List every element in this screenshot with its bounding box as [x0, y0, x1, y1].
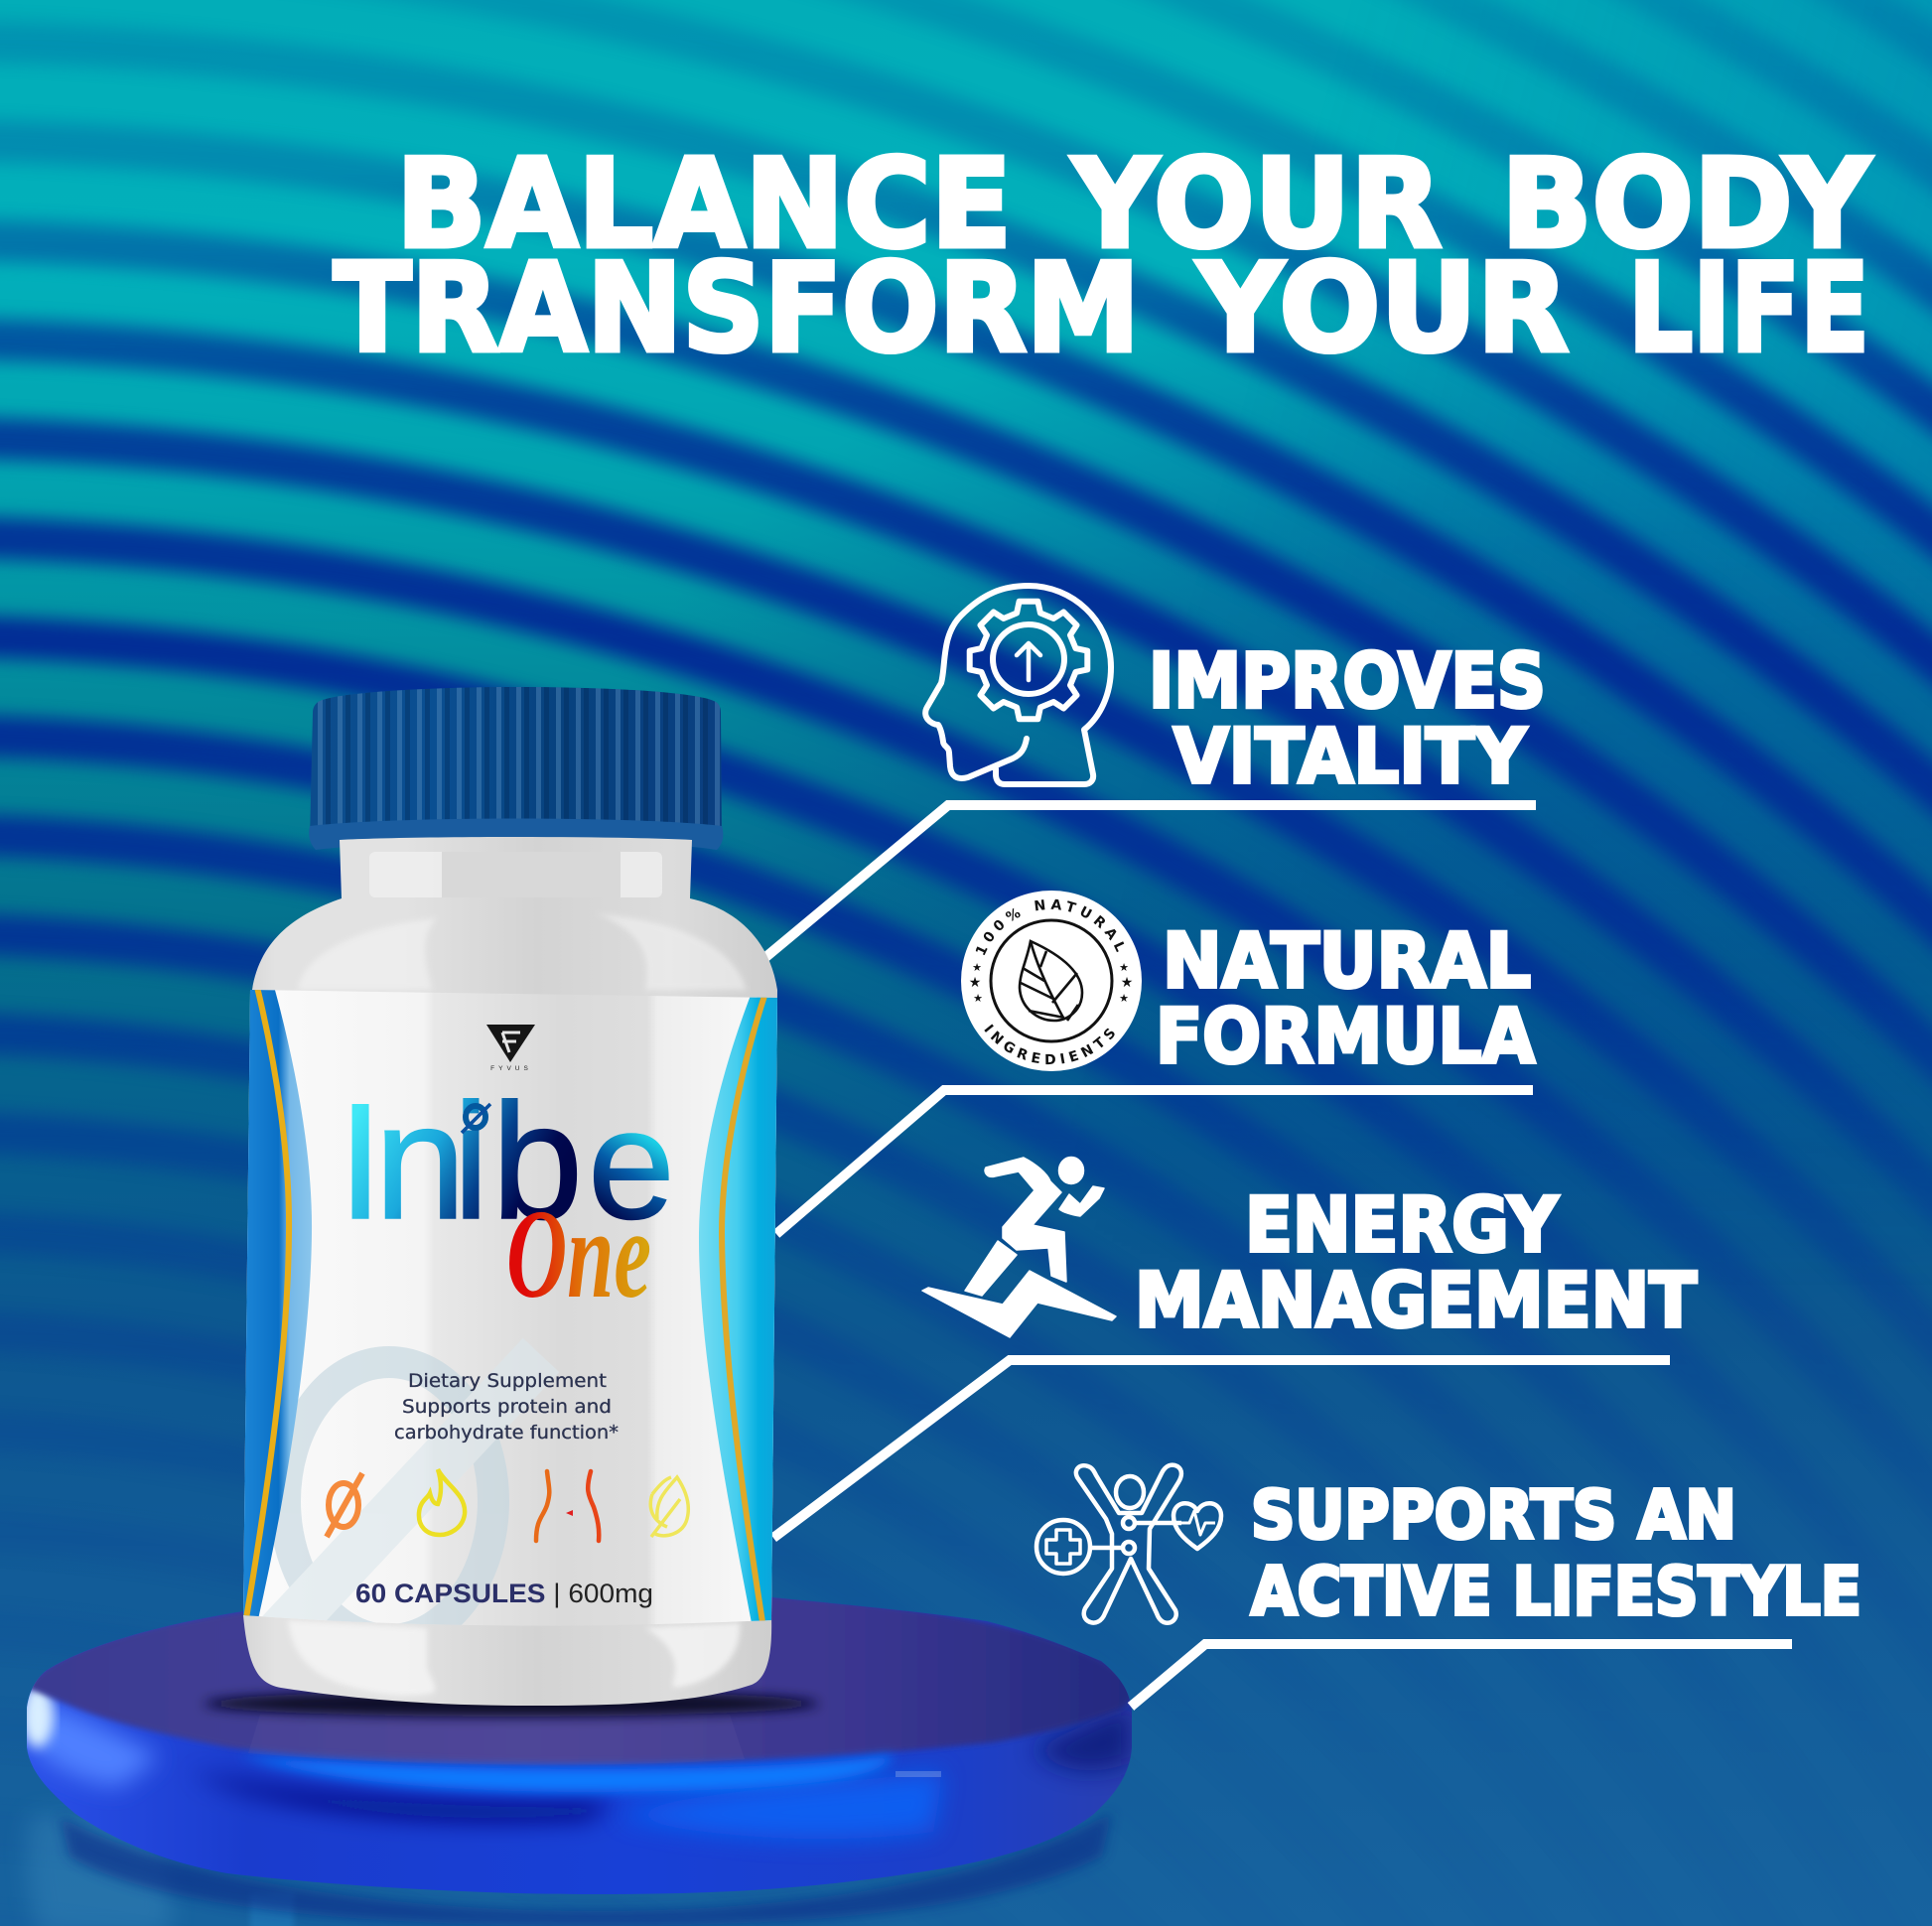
icon: leaf	[1020, 941, 1082, 1021]
text: improves vitality	[1149, 636, 1546, 800]
benefit: improves vitality	[925, 586, 1546, 800]
text: improves vitality: IMPROVES	[1149, 636, 1546, 725]
headline	[334, 134, 1872, 380]
One script: One	[506, 1183, 651, 1324]
icon: natural ingredients badge: ★	[1119, 961, 1129, 974]
watermark no symbol	[276, 1355, 541, 1640]
label icon: flame	[419, 1469, 465, 1535]
supplement description: carbohydrate function*	[394, 1422, 619, 1444]
product label	[238, 983, 784, 1640]
supplement description: Dietary Supplement	[408, 1370, 607, 1392]
platform: blue podium with reflection	[22, 1588, 1137, 1926]
text: natural formula: NATURAL	[1163, 916, 1531, 1005]
benefit: natural formula	[961, 891, 1537, 1080]
platform top surface	[27, 1588, 1137, 1764]
brand logo: FYVUS	[490, 1065, 532, 1072]
headline: YOUR	[1070, 134, 1442, 276]
text: energy management	[1135, 1180, 1697, 1344]
slashed o on the i	[462, 1104, 490, 1133]
brand logo	[486, 1025, 535, 1072]
icon: natural ingredients badge: ★	[972, 961, 982, 974]
icon: natural ingredients badge	[961, 891, 1142, 1071]
text: supports an active lifestyle: ACTIVE LIFESTYLE	[1251, 1553, 1862, 1630]
icon: natural ingredients badge: ★	[1121, 975, 1133, 991]
bottle cap	[309, 687, 723, 850]
connector lines	[763, 805, 1792, 1707]
left side wave	[238, 983, 312, 1628]
icon: natural ingredients badge: ★	[1119, 992, 1129, 1005]
benefit: supports an active lifestyle	[1036, 1465, 1862, 1630]
icon: natural ingredients badge: 100% NATURAL	[975, 899, 1124, 955]
headline: TRANSFORM	[334, 238, 1140, 380]
product name: e	[588, 1077, 675, 1252]
icon: natural ingredients badge: ★	[969, 975, 981, 991]
text: natural formula: FORMULA	[1156, 992, 1535, 1080]
label icon: slashed circle	[327, 1473, 362, 1537]
icon: active body with heart and cross	[1036, 1465, 1221, 1623]
headline: LIFE	[1628, 238, 1869, 380]
supplement description: Supports protein and	[402, 1396, 612, 1418]
capsule count: 60 CAPSULES | 600mg	[355, 1579, 653, 1608]
bottle neck and body	[243, 837, 777, 1706]
label icon: leaf	[650, 1477, 688, 1537]
text: supports an active lifestyle	[1251, 1476, 1862, 1630]
text: natural formula	[1156, 916, 1535, 1080]
text: energy management: MANAGEMENT	[1135, 1256, 1697, 1344]
headline: YOUR	[1195, 238, 1569, 380]
product name: Inib	[338, 1070, 583, 1254]
bottle	[238, 687, 784, 1706]
icon: natural ingredients badge: INGREDIENTS	[984, 1025, 1115, 1064]
icon: running figure	[922, 1158, 1116, 1337]
text: energy management: ENERGY	[1245, 1180, 1559, 1269]
icon: head with gear	[925, 586, 1111, 784]
supplement description	[394, 1370, 619, 1444]
right side wave	[699, 993, 784, 1628]
text: supports an active lifestyle: SUPPORTS AN	[1251, 1476, 1736, 1554]
headline: BALANCE	[396, 134, 1012, 276]
text: improves vitality: VITALITY	[1173, 712, 1527, 800]
headline: BODY	[1501, 134, 1872, 276]
icon: natural ingredients badge: ★	[973, 992, 983, 1005]
label icon: waist	[536, 1471, 599, 1541]
benefit: energy management	[922, 1158, 1697, 1344]
